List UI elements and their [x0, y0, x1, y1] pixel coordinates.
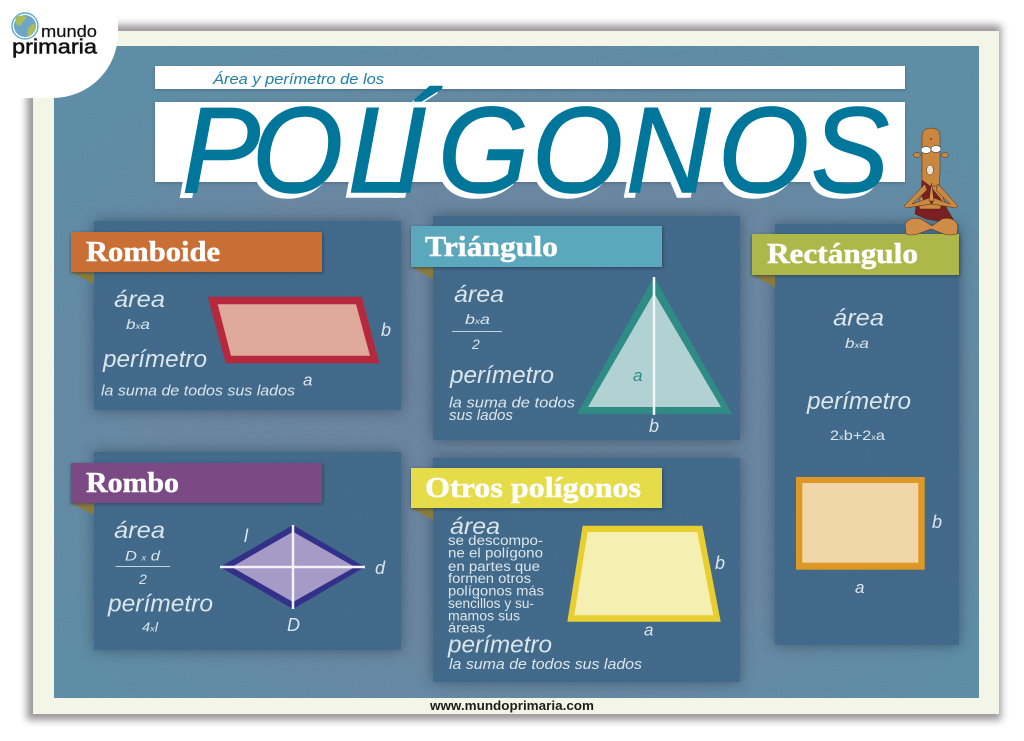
formula text: a — [633, 366, 642, 385]
formula text: sencillos y su- — [448, 596, 534, 611]
fold — [71, 503, 94, 515]
formula text: la suma de todos — [449, 394, 576, 412]
logo text: mundo — [41, 22, 97, 41]
formula text: área — [454, 281, 504, 307]
label: otros polígonos — [411, 468, 663, 509]
panel: rombo — [71, 452, 401, 650]
icon: globe — [12, 13, 38, 39]
formula text: se descompo- — [448, 533, 543, 548]
rhombus — [220, 525, 365, 609]
formula text: b — [649, 416, 659, 436]
formula text: la suma de todos sus lados — [101, 382, 296, 400]
formula text: perímetro — [806, 388, 911, 415]
formula text: polígonos más — [448, 584, 544, 598]
formula text: bxa — [845, 335, 869, 351]
formula text: perímetro — [102, 346, 207, 373]
title: POLÍGONOS — [177, 88, 884, 224]
panel: rectángulo — [752, 224, 960, 645]
label: otros polígonos: Otros polígonos — [425, 472, 641, 504]
formula text: 4xl — [142, 620, 159, 634]
fold — [411, 267, 433, 279]
formula text: a — [855, 578, 864, 597]
formula text: b xa — [465, 311, 490, 327]
subtitle: Área y perímetro de los — [212, 71, 385, 88]
formula text: área — [114, 286, 165, 312]
footer url: www.mundoprimaria.com — [429, 699, 594, 713]
formula text — [447, 513, 725, 673]
formula text: áreas — [448, 620, 485, 636]
formula text — [107, 517, 386, 635]
formula text: en partes que — [448, 559, 540, 574]
fold — [71, 272, 94, 284]
fold — [411, 508, 433, 520]
panel: romboide — [71, 221, 401, 410]
formula text: perímetro — [107, 590, 213, 618]
title: POLÍGONOS — [182, 83, 889, 219]
logo text — [12, 22, 98, 58]
title bar: subtitle — [155, 66, 905, 90]
label: rectángulo — [752, 234, 960, 276]
label: rombo: Rombo — [86, 467, 179, 499]
label: triángulo: Triángulo — [425, 231, 558, 263]
title bar: main — [155, 102, 905, 183]
formula text: b — [715, 553, 725, 573]
formula text — [101, 286, 391, 400]
formula text: D — [287, 615, 300, 635]
blue board — [54, 46, 979, 698]
formula text: b — [381, 320, 391, 340]
formula text: l — [244, 526, 249, 546]
formula text: b — [932, 512, 942, 532]
logo: white corner — [0, 0, 118, 98]
formula text — [806, 304, 942, 597]
formula text: 2 — [471, 336, 480, 352]
formula text: 2xb+2 xa — [830, 427, 885, 443]
formula text: a — [303, 370, 312, 390]
formula text — [449, 281, 659, 436]
formula text: área — [114, 517, 165, 543]
formula text: bxa — [126, 316, 150, 332]
formula text: sus lados — [449, 407, 513, 424]
icon: meditating monk — [904, 128, 958, 235]
logo text: primaria — [12, 36, 98, 58]
formula text: 2 — [138, 571, 147, 587]
formula text: a — [644, 620, 653, 640]
triangle — [577, 277, 732, 415]
formula text: formen otros — [448, 571, 531, 586]
panel: otros polígonos — [411, 458, 740, 682]
trapezoid — [567, 526, 721, 622]
fold — [752, 275, 775, 287]
rectangle — [796, 477, 925, 570]
label: romboide: Romboide — [86, 236, 220, 268]
formula text: mamos sus — [448, 608, 520, 624]
formula text: área — [450, 513, 500, 539]
label: romboide — [71, 232, 323, 273]
parallelogram — [208, 297, 379, 363]
panel: triángulo — [411, 216, 740, 440]
formula text: D x d — [125, 548, 161, 564]
formula text: perímetro — [447, 632, 552, 658]
label: rectángulo: Rectángulo — [767, 238, 918, 270]
label: rombo — [71, 463, 323, 504]
formula text: área — [833, 304, 884, 330]
formula text: ne el polígono — [448, 546, 543, 560]
formula text: d — [375, 558, 386, 578]
label: triángulo — [411, 226, 663, 268]
formula text: la suma de todos sus lados — [449, 656, 643, 673]
formula text: perímetro — [449, 362, 554, 389]
